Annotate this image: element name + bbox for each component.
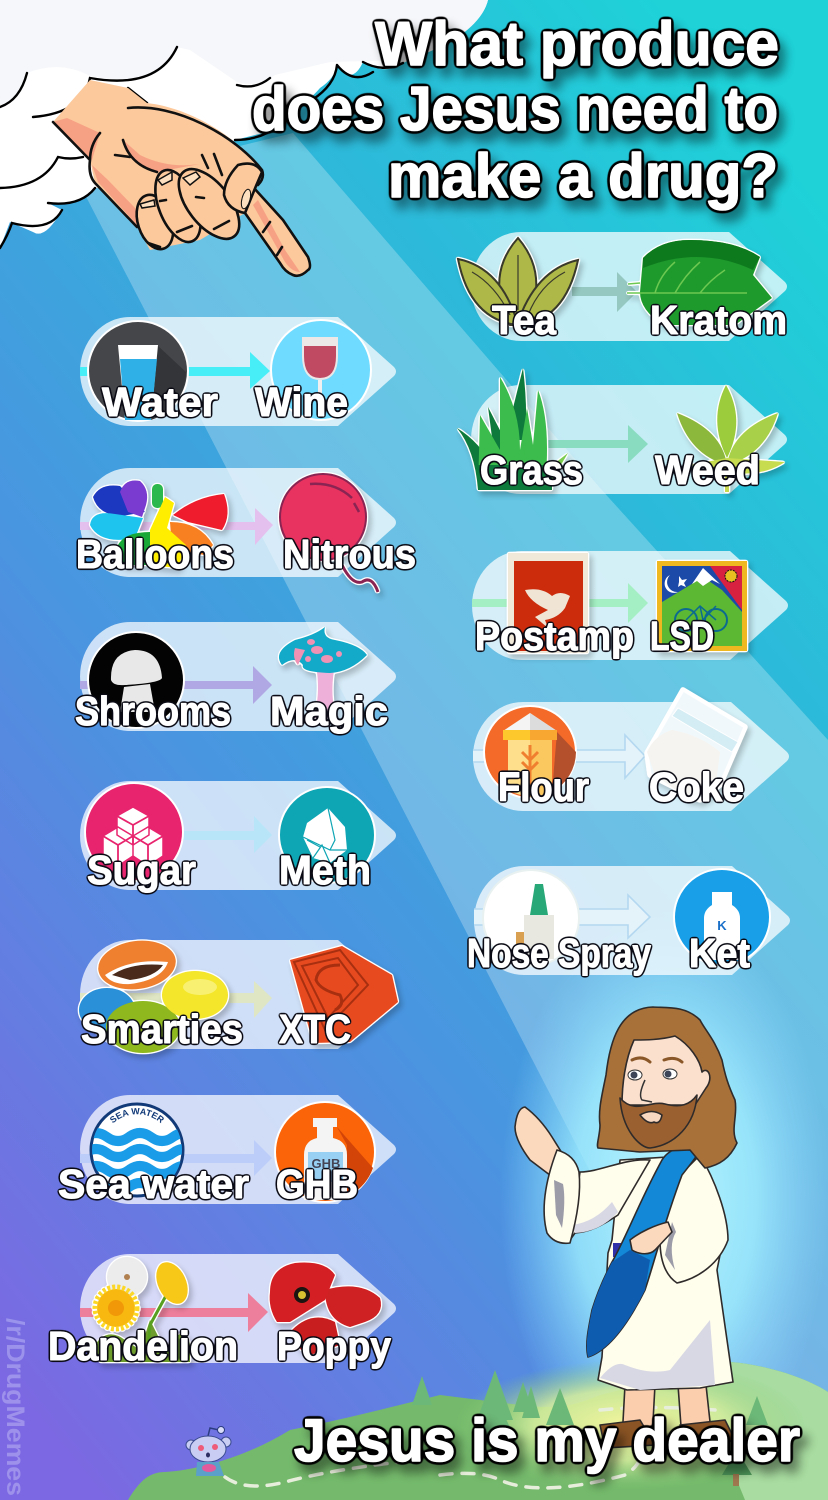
watermark: /r/DrugMemes <box>1 1318 29 1496</box>
panel: grass to weed: Weed <box>655 447 760 493</box>
title: make a drug? <box>388 142 778 211</box>
panel: sugar to meth: Sugar <box>87 847 196 893</box>
panel: nose spray to ket <box>467 866 790 976</box>
panel: grass to weed: Grass <box>480 447 583 493</box>
panel: shrooms to magic: Magic <box>270 688 388 734</box>
panel: dandelion to poppy: Poppy <box>277 1323 391 1369</box>
title: What produce <box>375 10 779 79</box>
cloud <box>0 0 488 248</box>
panel: water to wine: Water <box>102 379 218 425</box>
panel: water to wine: Wine <box>255 379 348 425</box>
glow behind Jesus <box>500 910 828 1490</box>
panel: dandelion to poppy: Dandelion <box>48 1323 238 1369</box>
panel: sea water to ghb: SEA WATER <box>110 1108 164 1124</box>
panel: flour to coke: Flour <box>498 764 589 810</box>
panel: sugar to meth: Meth <box>279 847 371 893</box>
panel: grass to weed <box>457 368 787 494</box>
panel: tea to kratom: Tea <box>492 297 557 343</box>
panel: shrooms to magic: Shrooms <box>75 688 231 734</box>
reddit mascot icon <box>186 1426 231 1476</box>
panel: sea water to ghb: Sea water <box>58 1161 249 1207</box>
title <box>252 10 779 211</box>
panel: postamp to lsd: LSD <box>650 613 714 659</box>
panel: nose spray to ket: K <box>717 918 727 933</box>
panel: sea water to ghb <box>57 1095 396 1207</box>
panel: water to wine <box>80 317 396 426</box>
panel: smarties to xtc: XTC <box>279 1006 351 1052</box>
panel: postamp to lsd <box>472 551 788 660</box>
panel: smarties to xtc <box>79 936 398 1053</box>
hill landscape <box>128 1360 828 1500</box>
panel: balloons to nitrous: Balloons <box>76 531 234 577</box>
panel: sea water to ghb: GHB <box>312 1156 340 1171</box>
panel: smarties to xtc: Smarties <box>81 1006 243 1052</box>
panel: tea to kratom: Kratom <box>650 297 787 343</box>
panel: postamp to lsd: Postamp <box>475 613 634 659</box>
panel: sugar to meth <box>80 781 396 893</box>
panel: flour to coke <box>473 690 789 811</box>
panel: flour to coke: Coke <box>649 764 744 810</box>
panel: shrooms to magic <box>75 622 396 734</box>
panel: sea water to ghb: GHB <box>276 1161 358 1207</box>
panel: dandelion to poppy <box>48 1254 396 1369</box>
title: does Jesus need to <box>252 75 778 144</box>
panel: nose spray to ket: Ket <box>689 930 750 976</box>
panel: balloons to nitrous <box>76 468 416 592</box>
panel: balloons to nitrous: Nitrous <box>283 531 416 577</box>
Jesus figure <box>515 1007 737 1450</box>
footer tagline: Jesus is my dealer <box>294 1407 800 1474</box>
pointing hand <box>53 80 310 276</box>
panel: tea to kratom <box>458 232 787 343</box>
panel: nose spray to ket: Nose Spray <box>467 930 651 976</box>
